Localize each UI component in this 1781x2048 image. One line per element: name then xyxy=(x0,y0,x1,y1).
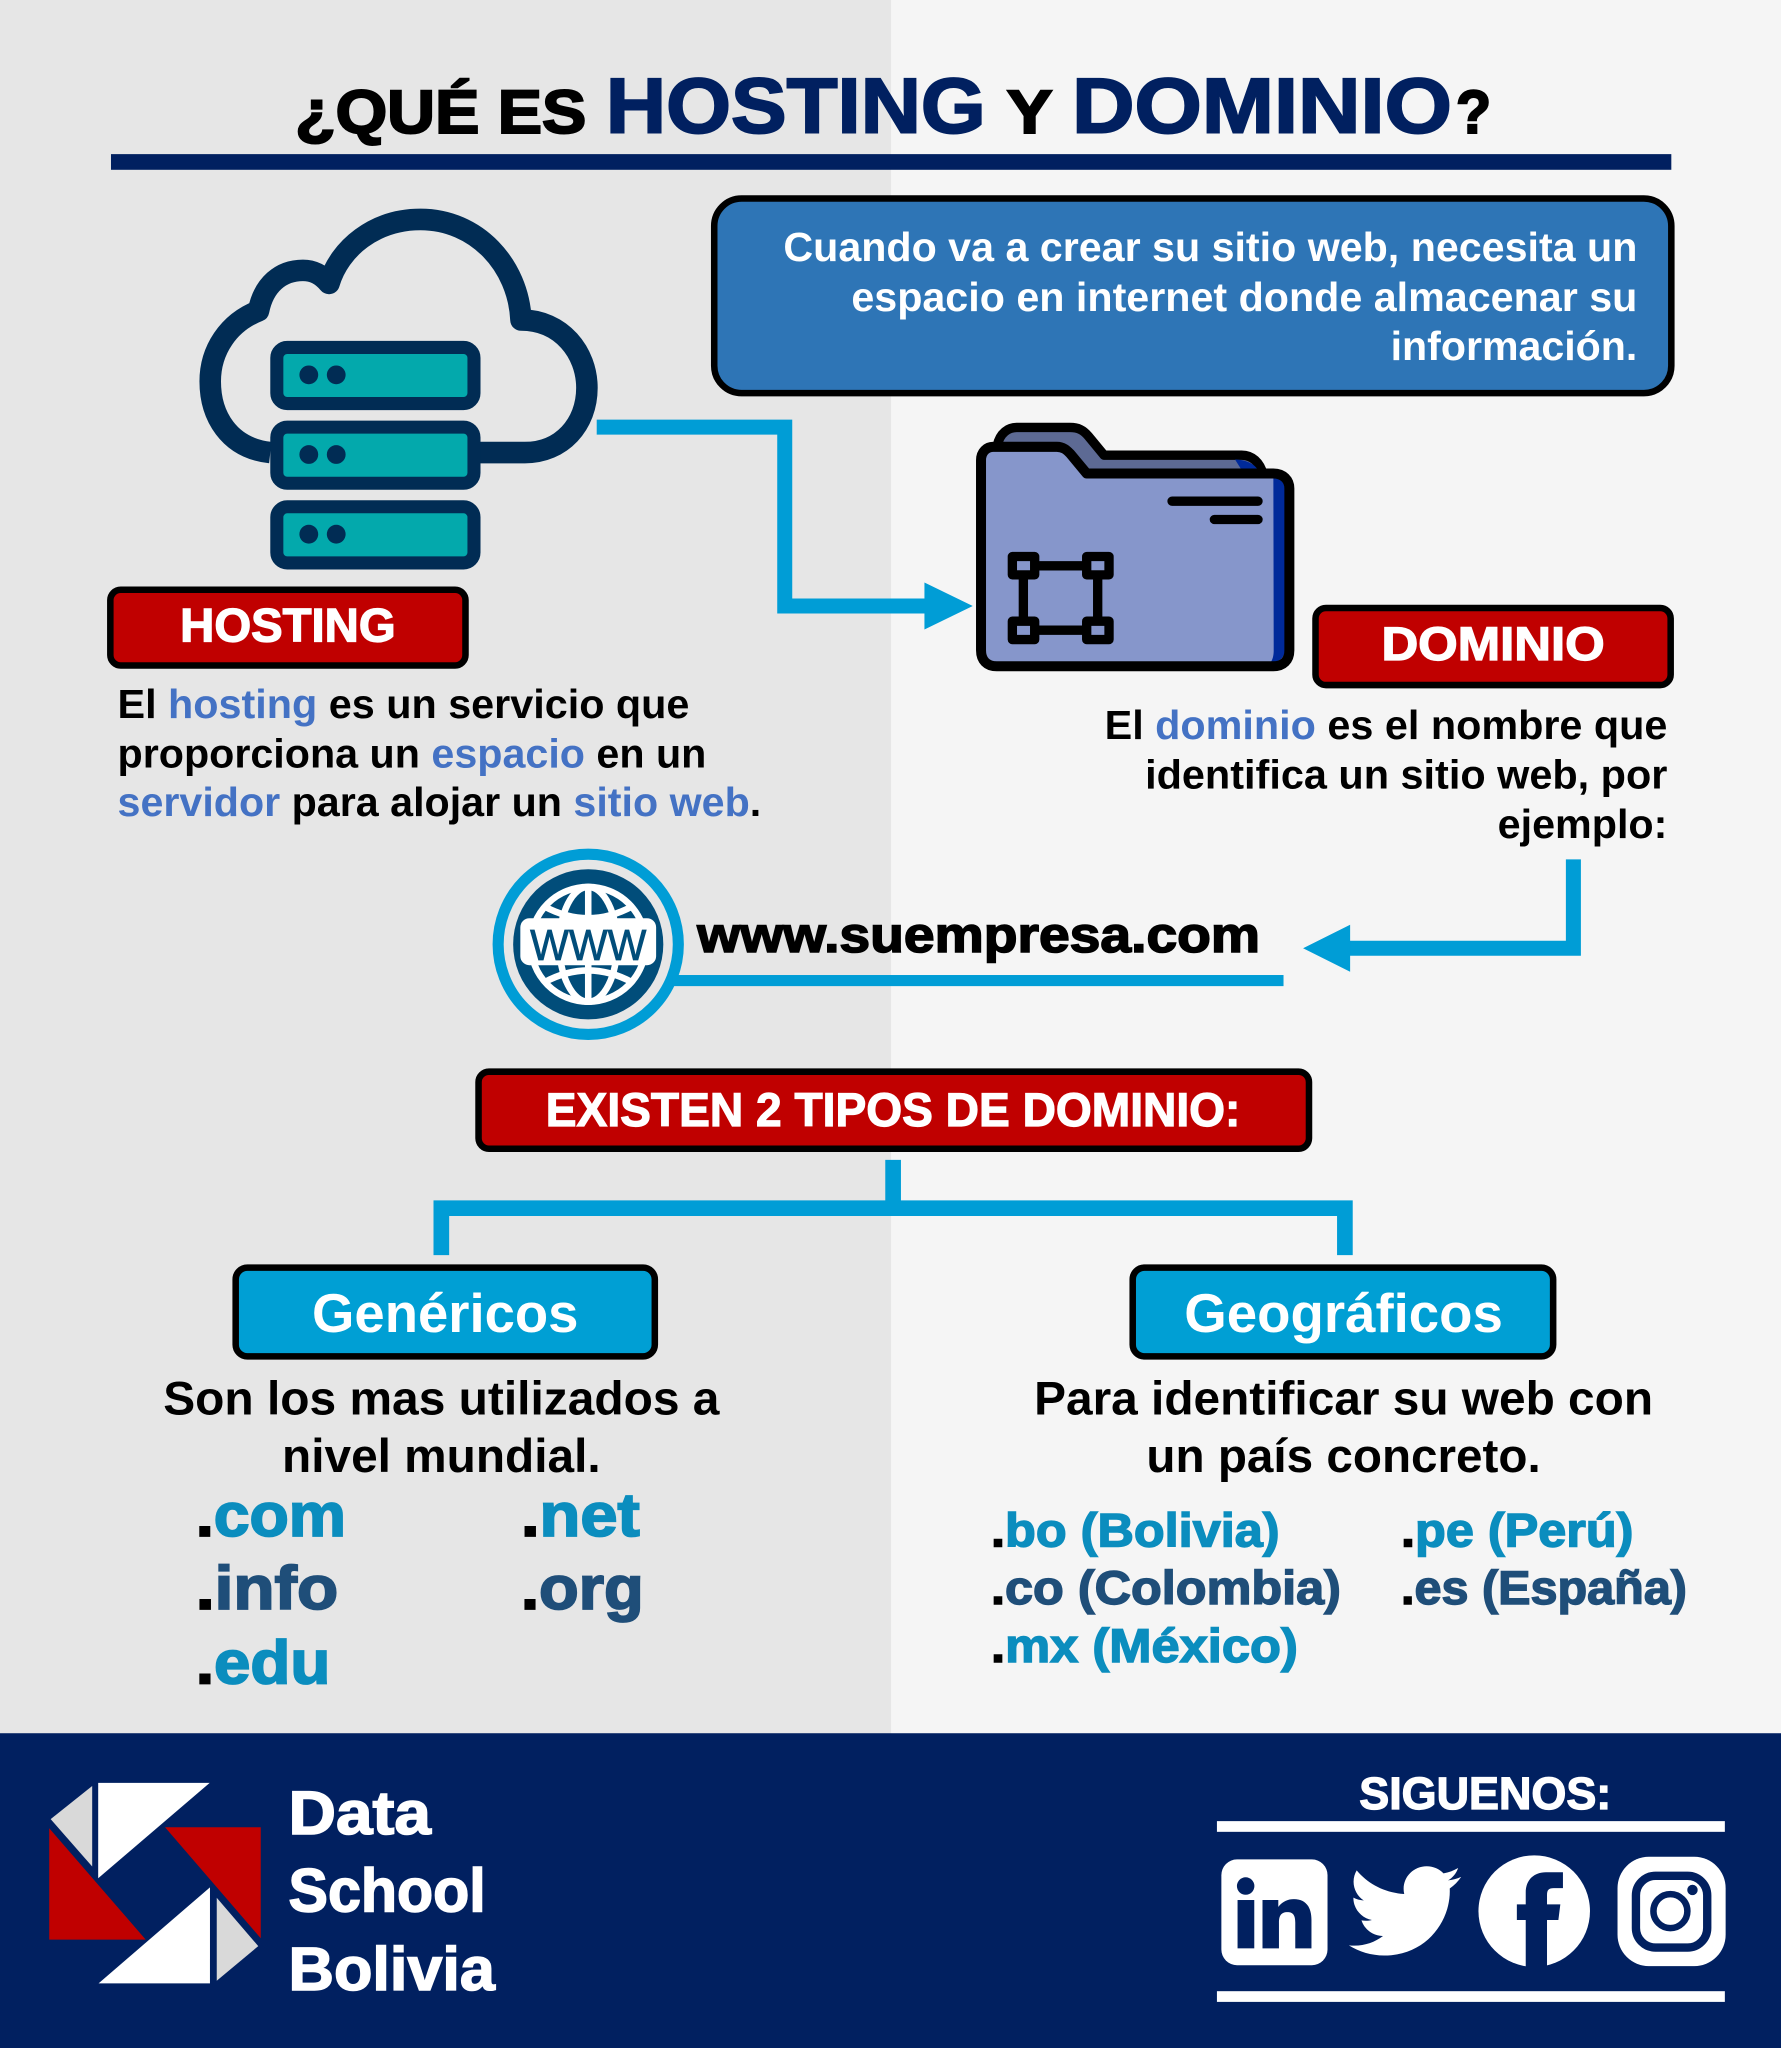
title: ? xyxy=(1456,78,1491,147)
label: dominio xyxy=(1316,608,1671,685)
text: geograficos description: Para identificar su web con xyxy=(1034,1372,1653,1425)
callout: intro text box: Cuando va a crear su sitio web, necesita un xyxy=(783,224,1637,270)
title xyxy=(295,62,1491,150)
title: Y xyxy=(1007,78,1052,147)
callout: intro text box xyxy=(714,199,1671,393)
label: dominio: DOMINIO xyxy=(1381,617,1605,670)
text: hosting definition: servidor para alojar un sitio web. xyxy=(118,779,761,825)
panel: footer xyxy=(0,1733,1781,2048)
banner: two domain types: EXISTEN 2 TIPOS DE DOMINIO: xyxy=(546,1083,1240,1136)
icon: linkedin xyxy=(1221,1859,1328,1965)
icon: www globe xyxy=(498,854,678,1034)
callout: intro text box: espacio en internet donde almacenar su xyxy=(851,274,1637,320)
list: generic domains: .com xyxy=(196,1481,346,1550)
heading: genericos xyxy=(236,1268,655,1356)
list: geographic domains: .mx (México) xyxy=(991,1619,1298,1672)
text: genericos description xyxy=(163,1372,720,1482)
icon: facebook xyxy=(1478,1855,1590,1967)
text: example url: www.suempresa.com xyxy=(696,907,1260,963)
tree connector xyxy=(441,1160,1345,1255)
icon: instagram xyxy=(1618,1857,1726,1966)
text: dominio definition xyxy=(1105,702,1668,847)
text: brand name xyxy=(289,1779,496,2004)
list: geographic domains: .pe (Perú) xyxy=(1401,1503,1633,1556)
icon: www globe: WWW xyxy=(530,922,647,970)
arrow: hosting to folder xyxy=(597,427,973,630)
text: hosting definition: El hosting es un servicio que xyxy=(118,681,689,727)
list: geographic domains: .bo (Bolivia) xyxy=(991,1503,1280,1556)
text: dominio definition: El dominio es el nombre que xyxy=(1105,702,1667,748)
heading: geograficos xyxy=(1133,1268,1553,1356)
title: ¿QUÉ ES xyxy=(295,78,586,147)
icon: cloud server xyxy=(210,219,587,563)
list: generic domains: .net xyxy=(521,1481,640,1550)
icon: data school logo xyxy=(49,1783,261,1983)
text: example url xyxy=(672,907,1284,986)
text: dominio definition: ejemplo: xyxy=(1498,801,1667,847)
text: hosting definition xyxy=(118,681,761,825)
heading: siguenos: SIGUENOS: xyxy=(1359,1768,1611,1819)
text: geograficos description: un país concreto. xyxy=(1146,1429,1541,1482)
callout: intro text box: información. xyxy=(1391,323,1637,369)
list: geographic domains xyxy=(991,1503,1687,1672)
list: generic domains: .info xyxy=(196,1554,338,1623)
heading: genericos: Genéricos xyxy=(312,1282,578,1344)
banner: two domain types xyxy=(479,1072,1309,1149)
list: generic domains: .edu xyxy=(196,1629,330,1698)
icon: folder xyxy=(981,427,1289,666)
panel: genericos xyxy=(163,1268,720,1698)
panel: geograficos xyxy=(991,1268,1687,1672)
text: dominio definition: identifica un sitio web, por xyxy=(1145,752,1668,798)
text: genericos description: Son los mas utilizados a xyxy=(163,1372,720,1425)
text: brand name: Bolivia xyxy=(289,1935,496,2004)
text: hosting definition: proporciona un espacio en un xyxy=(118,731,706,777)
label: hosting: HOSTING xyxy=(180,598,396,651)
label: hosting xyxy=(110,590,465,665)
title: HOSTING xyxy=(606,62,986,150)
text: brand name: Data xyxy=(289,1779,432,1848)
list: geographic domains: .co (Colombia) xyxy=(991,1561,1341,1614)
arrow: dominio to url xyxy=(1303,859,1573,972)
icon: twitter xyxy=(1349,1866,1461,1955)
text: genericos description: nivel mundial. xyxy=(282,1429,601,1482)
text: brand name: School xyxy=(289,1857,486,1926)
title: DOMINIO xyxy=(1072,62,1452,150)
heading: geograficos: Geográficos xyxy=(1184,1282,1503,1344)
list: geographic domains: .es (España) xyxy=(1401,1561,1687,1614)
list: generic domains: .org xyxy=(521,1554,644,1623)
text: geograficos description xyxy=(1034,1372,1653,1482)
list: generic domains xyxy=(196,1481,644,1698)
